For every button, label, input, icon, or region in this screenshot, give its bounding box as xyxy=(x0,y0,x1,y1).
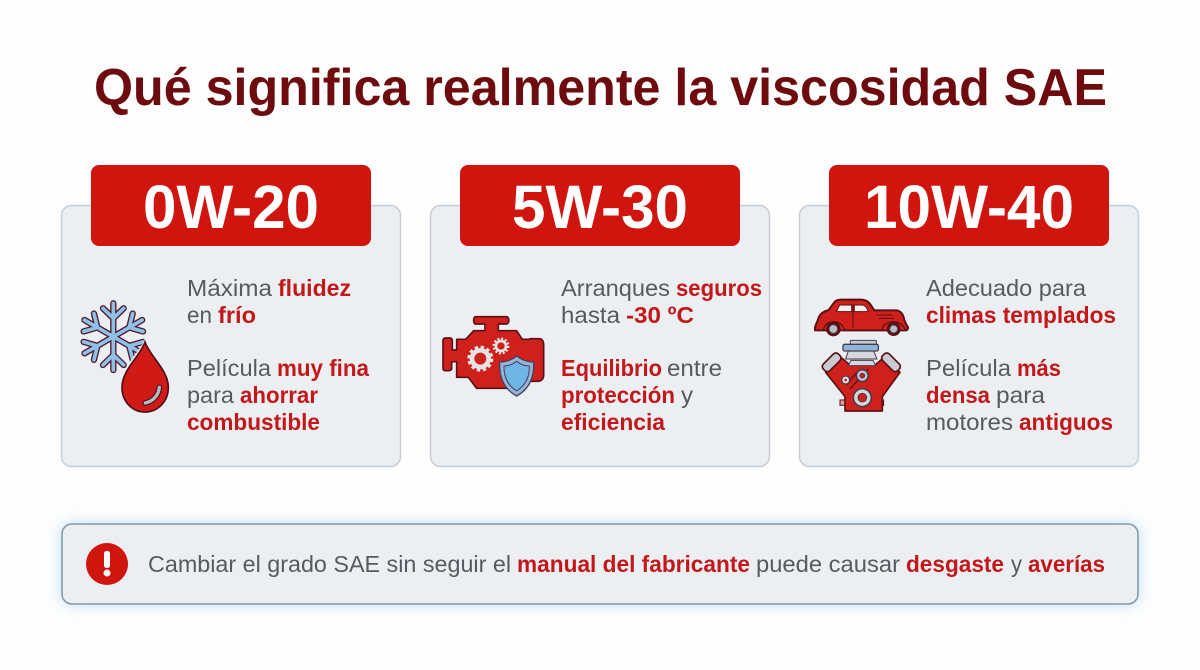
text: 5W-30 benefits xyxy=(561,275,762,435)
text: 10W-40 benefits: antiguos xyxy=(1019,409,1113,435)
panel: 10W-40 xyxy=(800,165,1138,466)
text: 10W-40 benefits: Película xyxy=(926,355,1011,381)
text: warning message: manual del fabricante xyxy=(517,551,750,577)
text: 0W-20 benefits: Máxima xyxy=(187,275,272,301)
card background 5W-30 xyxy=(430,206,770,466)
text: 10W-40 benefits xyxy=(926,275,1116,435)
text: warning message: y xyxy=(1011,551,1022,577)
text: 10W-40 benefits: Adecuado para xyxy=(926,275,1086,301)
text: 5W-30 benefits: y xyxy=(681,382,694,408)
text: warning message: averías xyxy=(1028,551,1105,577)
text: 5W-30 benefits: seguros xyxy=(676,275,762,301)
badge: 5W-30 xyxy=(460,165,740,246)
text: 0W-20 benefits: en xyxy=(187,302,212,328)
text: 0W-20 benefits: para xyxy=(187,382,234,408)
text: 0W-20 benefits: frío xyxy=(218,302,256,328)
badge: 5W-30: 5W-30 xyxy=(512,173,688,241)
text: 5W-30 benefits: entre xyxy=(667,355,722,381)
text: 5W-30 benefits: protección xyxy=(561,382,675,408)
text: 0W-20 benefits: muy fina xyxy=(277,355,369,381)
V engine xyxy=(821,340,902,411)
text: 0W-20 benefits: fluidez xyxy=(278,275,351,301)
card background 10W-40 xyxy=(800,206,1138,466)
icon: snowflake and oil drop xyxy=(79,303,171,414)
text: 5W-30 benefits: Arranques xyxy=(561,275,670,301)
text: 0W-20 benefits: ahorrar xyxy=(240,382,318,408)
callout: warning xyxy=(62,524,1138,604)
text: 0W-20 benefits xyxy=(187,275,369,435)
text: 0W-20 benefits: Película xyxy=(187,355,271,381)
car xyxy=(815,300,908,336)
badge: 0W-20 xyxy=(91,165,371,246)
card background 0W-20 xyxy=(62,206,400,466)
panel: 0W-20 xyxy=(62,165,400,466)
text: warning message: desgaste xyxy=(906,551,1004,577)
icon: engine with gears and shield xyxy=(443,317,544,396)
title: Qué significa realmente la viscosidad SAE xyxy=(94,59,1107,117)
text: warning message: Cambiar el grado SAE sin seguir el xyxy=(148,551,511,577)
icon: classic car and V engine xyxy=(815,300,908,411)
text: 10W-40 benefits: densa xyxy=(926,382,990,408)
text: 5W-30 benefits: -30 ºC xyxy=(626,302,694,328)
text: 0W-20 benefits: combustible xyxy=(187,409,320,435)
badge: 0W-20: 0W-20 xyxy=(143,173,319,241)
text: 5W-30 benefits: eficiencia xyxy=(561,409,665,435)
icon: exclamation mark xyxy=(86,543,128,585)
text: 10W-40 benefits: para xyxy=(996,382,1045,408)
text: 5W-30 benefits: hasta xyxy=(561,302,620,328)
text: 10W-40 benefits: motores xyxy=(926,409,1013,435)
text: 10W-40 benefits: más xyxy=(1017,355,1061,381)
text: 10W-40 benefits: climas templados xyxy=(926,302,1116,328)
text: warning message: puede causar xyxy=(756,551,900,577)
text: 5W-30 benefits: Equilibrio xyxy=(561,355,662,381)
badge: 10W-40 xyxy=(829,165,1109,246)
badge: 10W-40: 10W-40 xyxy=(864,173,1074,241)
text: warning message xyxy=(148,551,1105,577)
panel: 5W-30 xyxy=(430,165,770,466)
